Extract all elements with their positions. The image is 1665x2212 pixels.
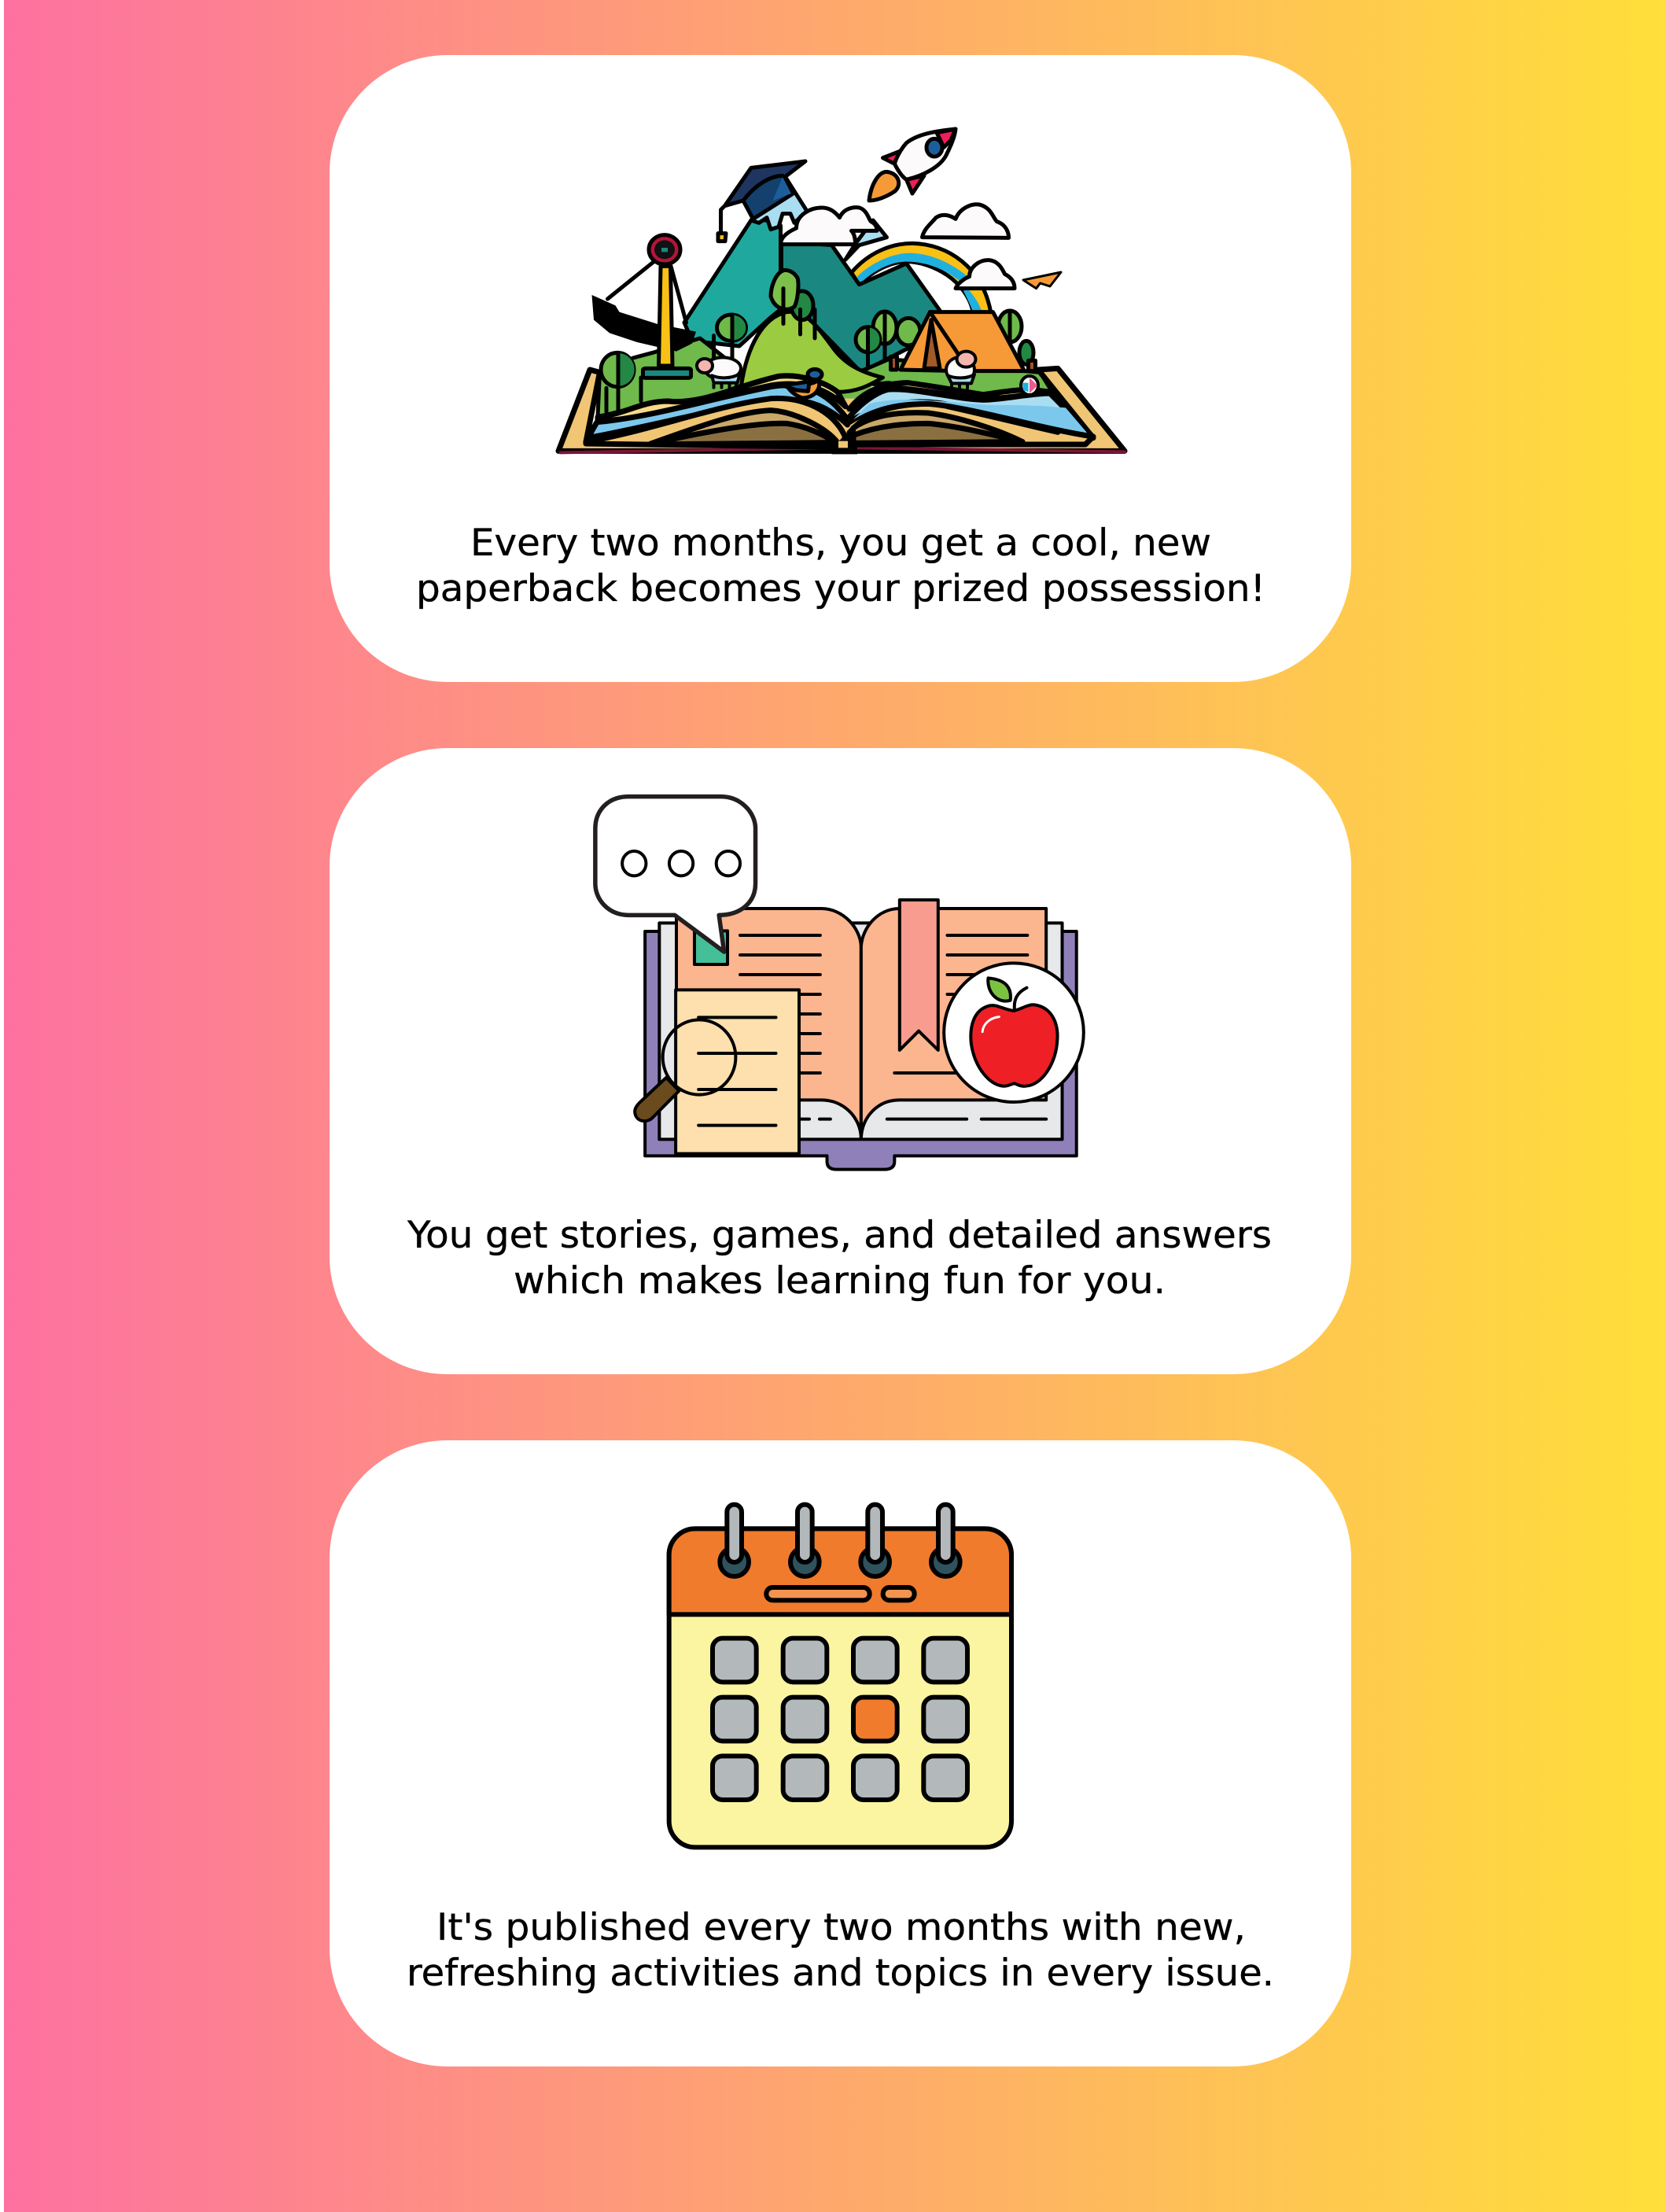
caption: stories and games: which makes learning fun for you. xyxy=(514,1259,1166,1303)
panel: published every two months xyxy=(330,1440,1351,2066)
mountains xyxy=(684,175,942,372)
inner pages xyxy=(659,923,1063,1139)
date grid xyxy=(713,1639,967,1800)
icon: graduation cap xyxy=(718,161,805,241)
trees xyxy=(601,244,1035,411)
document xyxy=(676,990,799,1154)
icon: calendar xyxy=(667,1502,1014,1850)
icon: open book with apple and speech bubble xyxy=(593,794,1085,1171)
green label xyxy=(694,931,728,964)
panel: stories and games xyxy=(330,748,1351,1374)
book pages xyxy=(558,368,1125,454)
bookmark xyxy=(900,900,938,1050)
text lines on pages xyxy=(740,935,1046,1119)
rainbow xyxy=(851,243,991,313)
calendar page xyxy=(669,1528,1011,1847)
caption: stories and games: You get stories, games, and detailed answers xyxy=(407,1214,1272,1257)
speech bubble xyxy=(595,797,756,952)
icon: duck xyxy=(783,369,822,398)
icon: sheep left xyxy=(697,357,741,388)
binder rings xyxy=(720,1505,960,1576)
icon: tent xyxy=(901,312,1024,371)
caption: published every two months: It's published every two months with new, xyxy=(437,1906,1246,1949)
icon: rocket xyxy=(869,129,956,201)
icon: pirate ship ride xyxy=(591,235,696,378)
caption: paperback xyxy=(416,522,1265,610)
icon: paper plane xyxy=(1023,272,1061,289)
icon: beach ball xyxy=(1021,376,1038,395)
caption: paperback: paperback becomes your prized possession! xyxy=(416,567,1265,610)
icon: sheep right xyxy=(946,352,975,388)
panel: paperback xyxy=(330,55,1351,682)
landscape ground xyxy=(598,312,1054,417)
header labels xyxy=(766,1587,915,1600)
clouds xyxy=(780,205,1015,289)
caption: paperback: Every two months, you get a cool, new xyxy=(470,522,1211,565)
caption: published every two months: refreshing activities and topics in every issue. xyxy=(407,1952,1274,1995)
left page xyxy=(676,909,861,1138)
book cover xyxy=(645,931,1077,1170)
apple badge xyxy=(944,963,1084,1102)
right page xyxy=(861,909,1046,1138)
caption: published every two months xyxy=(407,1906,1274,1995)
icon: pop-up storybook illustration xyxy=(555,127,1128,455)
calendar header xyxy=(669,1528,1011,1614)
magnifying glass xyxy=(635,1019,735,1121)
caption: stories and games xyxy=(407,1214,1272,1303)
